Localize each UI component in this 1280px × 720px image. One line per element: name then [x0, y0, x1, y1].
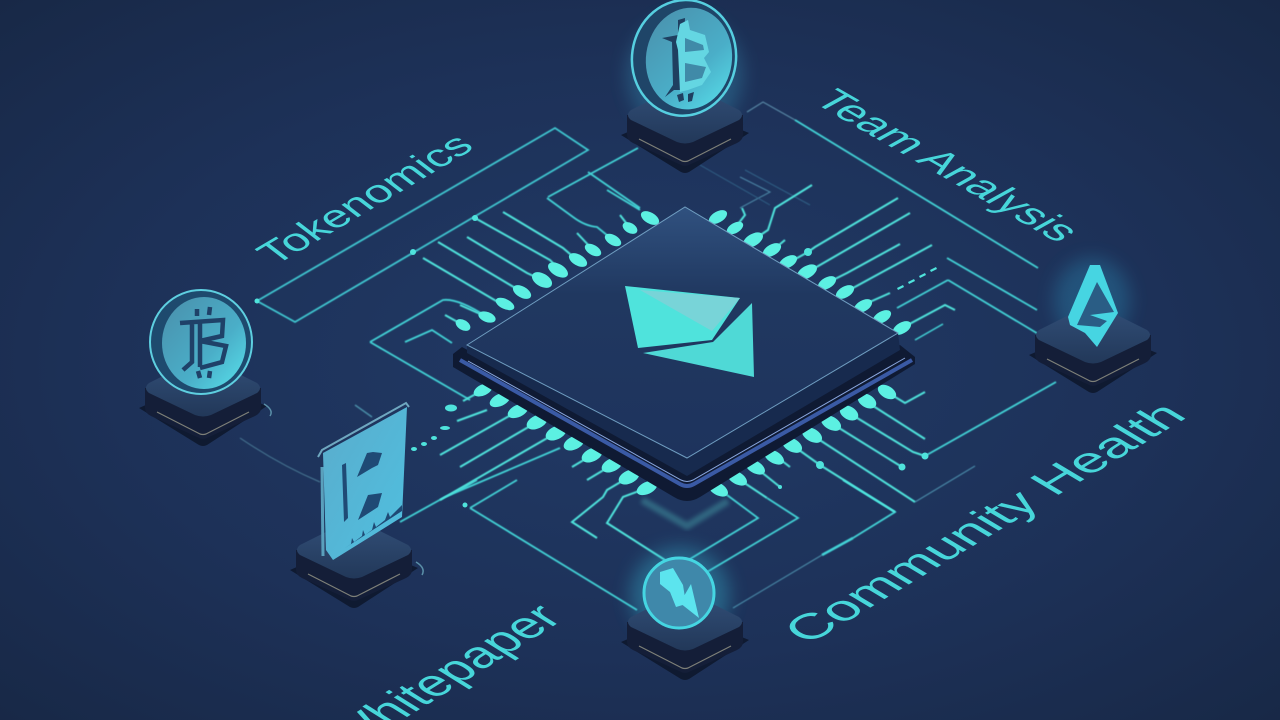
- label: Team Analysis: Team Analysis: [803, 84, 1090, 248]
- icon: bottom coin mark: [660, 568, 699, 618]
- circuit traces: outer connectors: [240, 102, 1056, 610]
- dotted trace: [254, 215, 937, 508]
- icon: bitcoin symbol: [180, 307, 226, 378]
- connector ring: [416, 562, 423, 575]
- icon: document glyph: [342, 452, 382, 522]
- node: right gem: [1029, 258, 1157, 393]
- connector ring: [264, 404, 271, 416]
- node: top bitcoin coin: [621, 0, 749, 173]
- circuit traces: chip pins: [423, 185, 955, 560]
- label: Community Health: Community Health: [771, 395, 1197, 650]
- chip pads: [454, 207, 913, 500]
- label: Tokenomics: Tokenomics: [247, 126, 482, 271]
- icon: bitcoin symbol: [662, 18, 711, 102]
- ethereum icon: [625, 286, 754, 377]
- node: bottom coin: [621, 547, 749, 680]
- central chip: [453, 207, 915, 526]
- node: left bitcoin coin: [139, 290, 271, 446]
- node: whitepaper document: [290, 403, 423, 608]
